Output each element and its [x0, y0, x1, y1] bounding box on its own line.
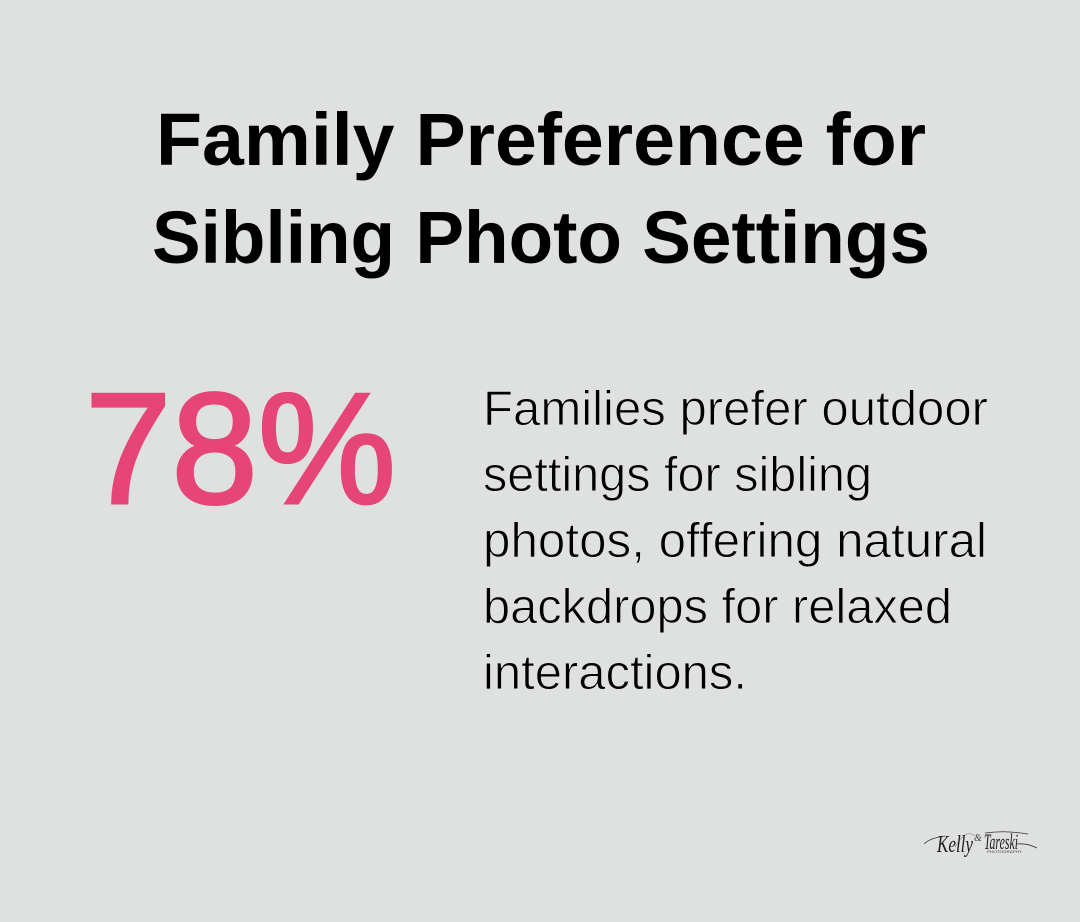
title: Sibling Photo Settings: [152, 196, 930, 279]
title: Family Preference for: [156, 98, 926, 181]
logo: Kelly & Tareski Photography signature: [924, 829, 1037, 858]
description text: backdrops for relaxed: [483, 580, 952, 634]
description text: photos, offering natural: [483, 514, 987, 568]
logo: Kelly & Tareski Photography signature: PHOTOGRAPHY: [987, 850, 1023, 854]
description text: interactions.: [483, 646, 747, 700]
description text: settings for sibling: [483, 448, 872, 502]
big statistic: 78%: 78%: [85, 361, 396, 537]
description text: Families prefer outdoor: [483, 382, 988, 436]
description text: [483, 382, 988, 700]
logo: Kelly & Tareski Photography signature: &: [974, 833, 982, 844]
logo: Kelly & Tareski Photography signature: Tareski: [984, 829, 1018, 854]
logo: Kelly & Tareski Photography signature: Kelly: [936, 832, 973, 858]
title: [152, 98, 930, 279]
